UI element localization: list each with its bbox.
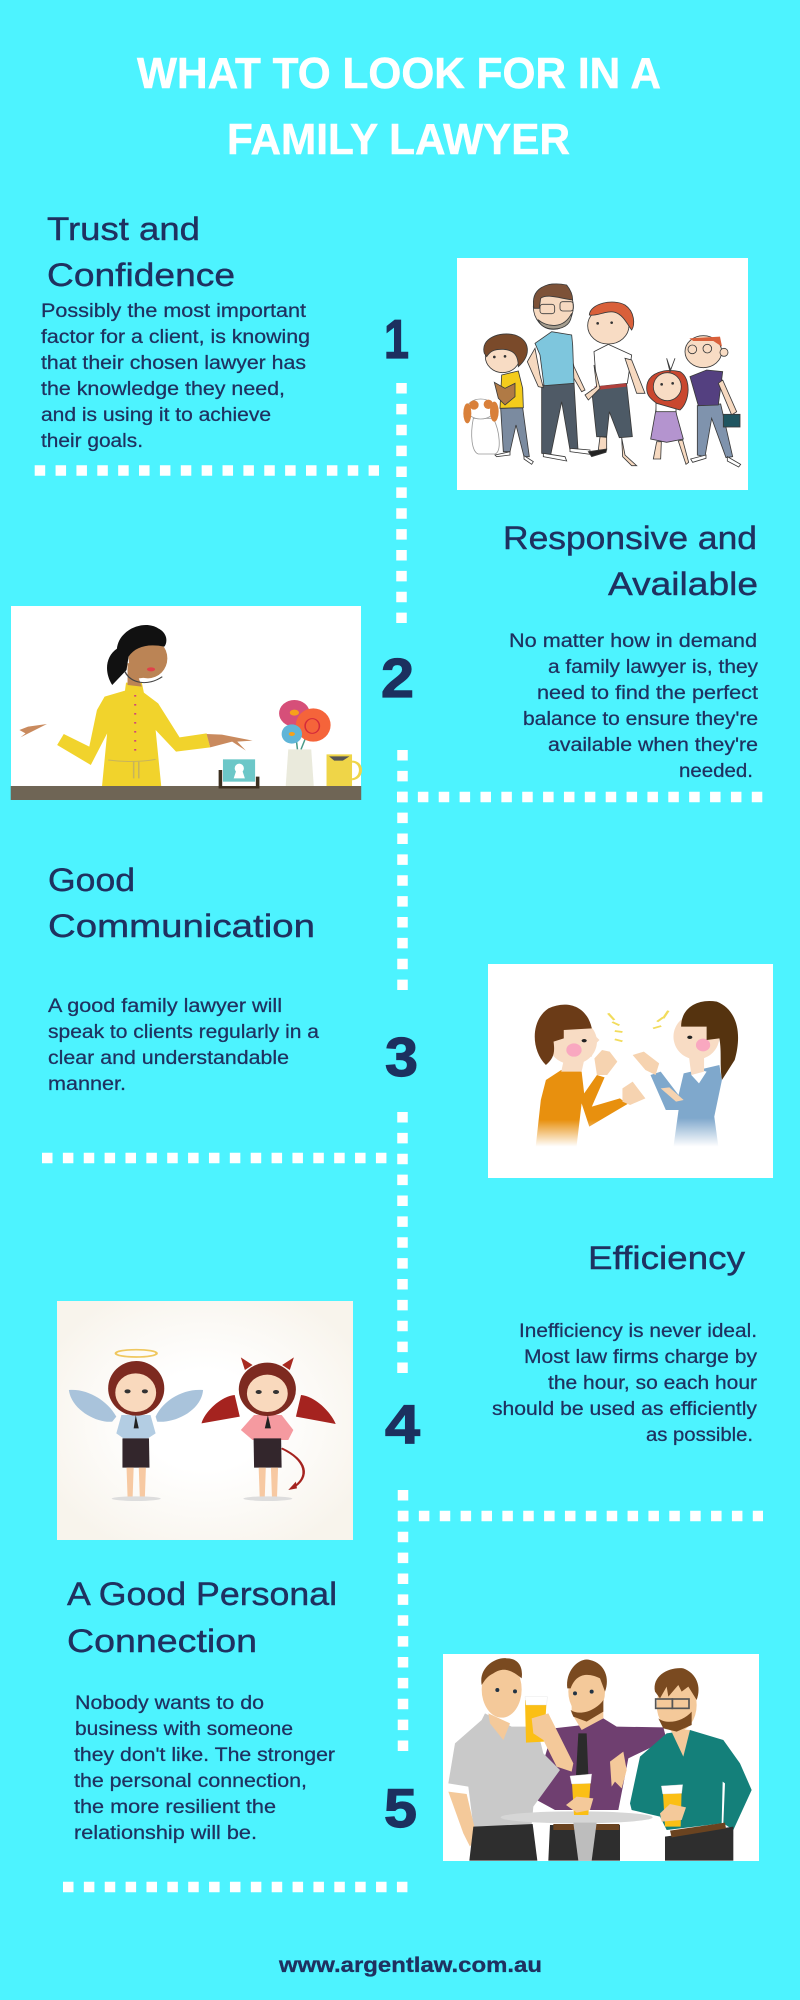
text block: responsive and available: available when they're [548, 735, 758, 756]
text block: efficiency: should be used as efficiently [492, 1399, 758, 1420]
purple shirt man [535, 1718, 667, 1810]
text block: responsive and available: needed. [679, 761, 753, 782]
number 1: 1 [384, 308, 409, 370]
text block: trust and confidence: Possibly the most important [41, 301, 307, 322]
heading: good communication: Communication [48, 908, 315, 944]
heading: efficiency: Efficiency [588, 1240, 745, 1276]
panel: responsive and available [11, 520, 759, 800]
number 5: 5 [384, 1777, 417, 1839]
text block: efficiency: the hour, so each hour [548, 1373, 758, 1394]
text block: a good personal connection: relationship will be. [74, 1823, 257, 1844]
heading: trust and confidence: Confidence [47, 257, 235, 293]
text block: trust and confidence: that their chosen lawyer has [41, 353, 306, 374]
heading: trust and confidence [47, 211, 235, 293]
girl [651, 402, 683, 442]
heading: a good personal connection [67, 1576, 337, 1659]
text block: trust and confidence: and is using it to achieve [41, 405, 271, 426]
heading: good communication [48, 862, 315, 944]
grey shirt man [448, 1713, 560, 1827]
text block: responsive and available: balance to ensure they're [523, 709, 758, 730]
text block: good communication: manner. [48, 1074, 126, 1095]
text block: responsive and available: a family lawyer is, they [548, 657, 759, 678]
right person [651, 1065, 722, 1147]
text block: good communication [48, 996, 319, 1095]
text block: efficiency: Inefficiency is never ideal. [519, 1321, 757, 1342]
illustration: two people talking [488, 964, 773, 1178]
panel: good communication [48, 862, 773, 1178]
heading: responsive and available: Responsive and [503, 520, 757, 556]
text block: trust and confidence: the knowledge they need, [41, 379, 285, 400]
text block: efficiency: Most law firms charge by [524, 1347, 758, 1368]
heading: a good personal connection: Connection [67, 1623, 257, 1659]
text block: trust and confidence: their goals. [41, 431, 143, 452]
contact file [223, 759, 255, 782]
panel: trust and confidence [41, 211, 748, 490]
text block: a good personal connection [74, 1693, 336, 1844]
text block: good communication: A good family lawyer will [48, 996, 282, 1017]
text block: trust and confidence: factor for a client, is knowing [41, 327, 310, 348]
left person [536, 1070, 628, 1147]
illustration: family [457, 258, 748, 490]
heading: trust and confidence: Trust and [47, 211, 200, 247]
text block: a good personal connection: the personal connection, [74, 1771, 307, 1792]
beers [572, 1778, 591, 1815]
heading: responsive and available [503, 520, 758, 602]
desk [11, 786, 361, 800]
text block: efficiency [492, 1321, 758, 1446]
text block: responsive and available [509, 631, 759, 782]
teal shirt man [630, 1730, 752, 1830]
text block: a good personal connection: Nobody wants to do [75, 1693, 264, 1714]
text block: good communication: speak to clients regularly in a [48, 1022, 319, 1043]
mug [327, 754, 352, 786]
footer website address: www.argentlaw.com.au [278, 1954, 542, 1977]
illustration: three men with drinks [443, 1654, 759, 1861]
text block: a good personal connection: business with someone [75, 1719, 293, 1740]
title: WHAT TO LOOK FOR IN A [137, 50, 661, 98]
text block: efficiency: as possible. [646, 1425, 753, 1446]
panel: efficiency [57, 1240, 758, 1540]
illustration: receptionist [11, 606, 361, 800]
text block: trust and confidence [41, 301, 310, 452]
title [137, 50, 661, 164]
text block: responsive and available: need to find the perfect [537, 683, 759, 704]
boy right [697, 404, 733, 458]
text block: a good personal connection: they don't like. The stronger [74, 1745, 336, 1766]
number 3: 3 [385, 1026, 418, 1088]
heading: responsive and available: Available [608, 566, 758, 602]
text block: good communication: clear and understandable [48, 1048, 289, 1069]
dog [472, 418, 499, 454]
title: FAMILY LAWYER [227, 116, 570, 164]
father [542, 383, 578, 455]
boy left [501, 408, 529, 457]
heading: a good personal connection: A Good Personal [67, 1576, 337, 1612]
panel: a good personal connection [67, 1576, 759, 1861]
flowers in vase [286, 749, 314, 786]
woman [57, 683, 210, 786]
angel [116, 1350, 157, 1357]
devil [202, 1395, 336, 1424]
table [501, 1811, 653, 1823]
number 4: 4 [385, 1393, 420, 1455]
mother [594, 344, 632, 387]
text block: a good personal connection: the more resilient the [74, 1797, 276, 1818]
illustration: angel and devil [57, 1301, 353, 1540]
heading: good communication: Good [48, 862, 135, 898]
text block: responsive and available: No matter how in demand [509, 631, 757, 652]
number 2: 2 [381, 647, 414, 709]
